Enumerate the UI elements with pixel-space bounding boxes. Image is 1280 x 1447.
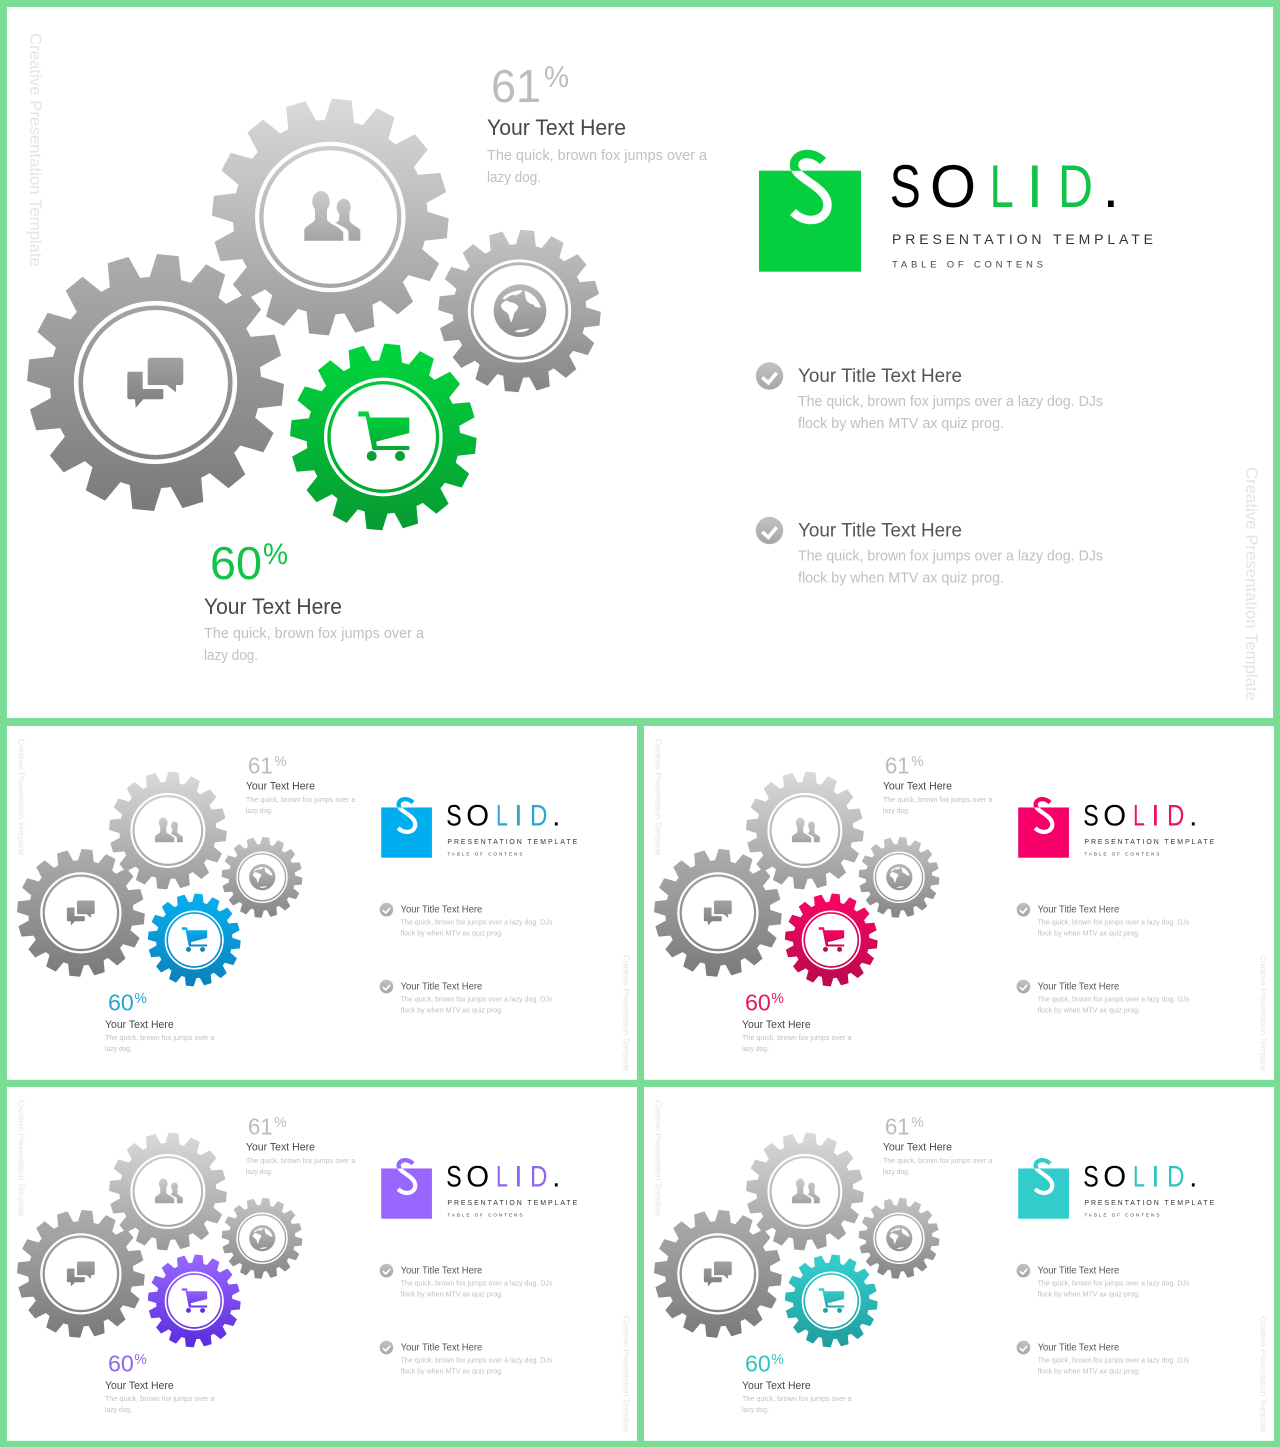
stat 61%: lazy dog.: [883, 1167, 910, 1176]
logo: S: [446, 800, 462, 833]
stat 60%: The quick, brown fox jumps over a: [204, 626, 425, 642]
logo: [1018, 799, 1215, 858]
list item 2: Your Title Text Here: [1038, 981, 1119, 992]
stat 61%: %: [911, 1114, 924, 1131]
stat 61%: %: [544, 61, 569, 94]
logo: PRESENTATION TEMPLATE: [1084, 1200, 1215, 1207]
logo: .: [552, 800, 560, 833]
list item 2: Your Title Text Here: [798, 520, 962, 542]
list item 2: flock by when MTV ax quiz prog.: [1038, 1005, 1140, 1014]
logo: L: [496, 1161, 508, 1194]
stat 61%: Your Text Here: [246, 781, 315, 793]
logo: O: [1103, 1161, 1126, 1194]
logo: S: [446, 1161, 462, 1194]
gear: cart: [785, 1254, 878, 1348]
list item 1: Your Title Text Here: [1038, 1266, 1119, 1277]
stat 60%: lazy dog.: [742, 1405, 769, 1414]
logo: O: [1103, 800, 1126, 833]
stat 60%: %: [134, 1351, 147, 1368]
logo: L: [1133, 800, 1145, 833]
logo: L: [990, 153, 1014, 220]
list item 1: Your Title Text Here: [401, 1266, 482, 1277]
logo: TABLE OF CONTENS: [1084, 852, 1160, 858]
logo: D: [1058, 153, 1093, 220]
list item 2: [380, 980, 553, 1014]
stat 61%: Your Text Here: [883, 1142, 952, 1154]
panel: blue slide: [7, 726, 637, 1080]
list item 2: [1017, 980, 1190, 1014]
stat 61%: The quick, brown fox jumps over a: [883, 795, 992, 804]
list item 2: [756, 517, 1103, 586]
list item 1: flock by when MTV ax quiz prog.: [1038, 1289, 1140, 1298]
stat 60%: 60: [745, 1351, 771, 1377]
logo: O: [466, 1161, 489, 1194]
stat 61%: lazy dog.: [883, 806, 910, 815]
list item 1: Your Title Text Here: [1038, 905, 1119, 916]
list item 2: The quick, brown fox jumps over a lazy dog. DJs: [401, 1355, 553, 1364]
stat 60%: %: [771, 1351, 784, 1368]
stat 60%: Your Text Here: [105, 1380, 174, 1392]
gear: people: [211, 98, 449, 336]
stat 60%: Your Text Here: [204, 594, 342, 619]
stat 60%: 60: [108, 990, 134, 1016]
list item 1: [380, 1264, 553, 1298]
gear: globe: [858, 1198, 940, 1279]
list item 1: [1017, 903, 1190, 937]
logo: .: [1102, 153, 1119, 220]
side label right: Creative Presentation Template: [1259, 1316, 1268, 1433]
gear: globe: [221, 837, 303, 918]
gear: people: [109, 1132, 227, 1251]
stat 60%: The quick, brown fox jumps over a: [105, 1394, 214, 1403]
logo: TABLE OF CONTENS: [447, 1213, 523, 1219]
list item 2: flock by when MTV ax quiz prog.: [401, 1005, 503, 1014]
logo: O: [930, 153, 976, 220]
stat 61%: %: [911, 753, 924, 770]
stat 60%: Your Text Here: [742, 1380, 811, 1392]
list item 1: flock by when MTV ax quiz prog.: [798, 416, 1004, 432]
stat 60%: %: [134, 990, 147, 1007]
logo: I: [1151, 1161, 1160, 1194]
list item 2: The quick, brown fox jumps over a lazy dog. DJs: [1038, 994, 1190, 1003]
logo: TABLE OF CONTENS: [1084, 1213, 1160, 1219]
stat 61%: Your Text Here: [883, 781, 952, 793]
logo: O: [466, 800, 489, 833]
gear: globe: [858, 837, 940, 918]
logo: I: [514, 800, 523, 833]
logo: .: [1189, 800, 1197, 833]
stat 61%: The quick, brown fox jumps over a: [246, 795, 355, 804]
stat 61%: lazy dog.: [246, 1167, 273, 1176]
logo: D: [1167, 1161, 1184, 1194]
stat 60%: The quick, brown fox jumps over a: [105, 1033, 214, 1042]
list item 1: Your Title Text Here: [401, 905, 482, 916]
logo: [381, 1160, 578, 1219]
logo: .: [552, 1161, 560, 1194]
list item 1: flock by when MTV ax quiz prog.: [401, 928, 503, 937]
stat 60%: lazy dog.: [105, 1044, 132, 1053]
logo: S: [890, 153, 921, 220]
list item 2: The quick, brown fox jumps over a lazy dog. DJs: [798, 548, 1103, 564]
side label left: Creative Presentation Template: [16, 1100, 25, 1217]
list item 2: flock by when MTV ax quiz prog.: [1038, 1366, 1140, 1375]
logo: PRESENTATION TEMPLATE: [892, 231, 1153, 247]
list item 2: Your Title Text Here: [401, 1342, 482, 1353]
stat 60%: 60: [210, 537, 262, 589]
stat 61%: lazy dog.: [246, 806, 273, 815]
stat 61%: Your Text Here: [246, 1142, 315, 1154]
panel: purple slide: [7, 1087, 637, 1441]
logo: S: [1083, 1161, 1099, 1194]
panel: teal slide: [644, 1087, 1274, 1441]
logo: TABLE OF CONTENS: [447, 852, 523, 858]
logo: D: [530, 1161, 547, 1194]
list item 1: flock by when MTV ax quiz prog.: [1038, 928, 1140, 937]
stat 60%: [204, 537, 425, 664]
stat 61%: [883, 752, 992, 815]
logo: S: [1083, 800, 1099, 833]
gear: chat: [26, 253, 285, 512]
list item 1: flock by when MTV ax quiz prog.: [401, 1289, 503, 1298]
stat 60%: [742, 1351, 851, 1414]
logo: L: [1133, 1161, 1145, 1194]
logo: L: [496, 800, 508, 833]
stat 61%: Your Text Here: [487, 115, 626, 140]
side label right: Creative Presentation Template: [622, 1316, 631, 1433]
list item 2: [1017, 1341, 1190, 1375]
list item 1: [380, 903, 553, 937]
gear: globe: [438, 229, 601, 393]
stat 61%: The quick, brown fox jumps over a: [883, 1156, 992, 1165]
stat 61%: %: [274, 1114, 287, 1131]
gear: cart: [785, 893, 878, 987]
stat 60%: 60: [108, 1351, 134, 1377]
side label left: Creative Presentation Template: [653, 1100, 662, 1217]
side label right: Creative Presentation Template: [622, 955, 631, 1072]
list item 1: The quick, brown fox jumps over a lazy dog. DJs: [1038, 1279, 1190, 1288]
list item 2: The quick, brown fox jumps over a lazy dog. DJs: [401, 994, 553, 1003]
stat 61%: lazy dog.: [487, 170, 541, 186]
logo: I: [1151, 800, 1160, 833]
logo: PRESENTATION TEMPLATE: [1084, 839, 1215, 846]
side label left: Creative Presentation Template: [26, 33, 44, 267]
logo: D: [530, 800, 547, 833]
stat 60%: The quick, brown fox jumps over a: [742, 1033, 851, 1042]
gear: globe: [221, 1198, 303, 1279]
stat 61%: The quick, brown fox jumps over a: [246, 1156, 355, 1165]
gear: chat: [654, 849, 782, 977]
list item 1: The quick, brown fox jumps over a lazy dog. DJs: [401, 1279, 553, 1288]
side label right: Creative Presentation Template: [1259, 955, 1268, 1072]
gear: people: [109, 771, 227, 890]
stat 61%: 61: [491, 60, 541, 112]
stat 60%: lazy dog.: [105, 1405, 132, 1414]
stat 61%: 61: [248, 1113, 273, 1139]
list item 2: flock by when MTV ax quiz prog.: [401, 1366, 503, 1375]
stat 60%: lazy dog.: [204, 648, 258, 664]
list item 2: Your Title Text Here: [401, 981, 482, 992]
stat 61%: 61: [248, 752, 273, 778]
stat 60%: Your Text Here: [105, 1019, 174, 1031]
side label left: Creative Presentation Template: [653, 739, 662, 856]
stat 60%: %: [771, 990, 784, 1007]
gear: cart: [148, 1254, 241, 1348]
stat 60%: [742, 990, 851, 1053]
stat 61%: %: [274, 753, 287, 770]
logo: .: [1189, 1161, 1197, 1194]
logo: I: [514, 1161, 523, 1194]
list item 1: The quick, brown fox jumps over a lazy dog. DJs: [401, 918, 553, 927]
stat 61%: [246, 752, 355, 815]
logo: PRESENTATION TEMPLATE: [447, 839, 578, 846]
stat 60%: The quick, brown fox jumps over a: [742, 1394, 851, 1403]
stat 61%: 61: [885, 1113, 910, 1139]
logo: [381, 799, 578, 858]
logo: TABLE OF CONTENS: [892, 260, 1043, 270]
list item 2: The quick, brown fox jumps over a lazy dog. DJs: [1038, 1355, 1190, 1364]
gear: people: [746, 1132, 864, 1251]
list item 1: The quick, brown fox jumps over a lazy dog. DJs: [798, 394, 1103, 410]
logo: PRESENTATION TEMPLATE: [447, 1200, 578, 1207]
gear: chat: [654, 1210, 782, 1338]
list item 2: Your Title Text Here: [1038, 1342, 1119, 1353]
panel: pink slide: [644, 726, 1274, 1080]
gear: chat: [17, 1210, 145, 1338]
list item 2: flock by when MTV ax quiz prog.: [798, 570, 1004, 586]
list item 1: Your Title Text Here: [798, 365, 962, 387]
stat 60%: Your Text Here: [742, 1019, 811, 1031]
gear: cart: [148, 893, 241, 987]
side label right: Creative Presentation Template: [1242, 467, 1260, 701]
stat 60%: %: [263, 538, 288, 571]
stat 60%: lazy dog.: [742, 1044, 769, 1053]
stat 61%: 61: [885, 752, 910, 778]
gear: chat: [17, 849, 145, 977]
list item 1: The quick, brown fox jumps over a lazy dog. DJs: [1038, 918, 1190, 927]
stat 60%: [105, 990, 214, 1053]
side label left: Creative Presentation Template: [16, 739, 25, 856]
list item 1: [756, 362, 1103, 432]
stat 61%: The quick, brown fox jumps over a: [487, 148, 708, 164]
panel: main green slide: [7, 7, 1273, 718]
logo: [1018, 1160, 1215, 1219]
logo: [759, 153, 1153, 272]
stat 61%: [883, 1113, 992, 1176]
list item 2: [380, 1341, 553, 1375]
gear: people: [746, 771, 864, 890]
list item 1: [1017, 1264, 1190, 1298]
logo: I: [1026, 153, 1043, 220]
stat 61%: [487, 60, 708, 186]
logo: D: [1167, 800, 1184, 833]
stat 61%: [246, 1113, 355, 1176]
stat 60%: 60: [745, 990, 771, 1016]
gear: cart: [289, 343, 477, 531]
stat 60%: [105, 1351, 214, 1414]
